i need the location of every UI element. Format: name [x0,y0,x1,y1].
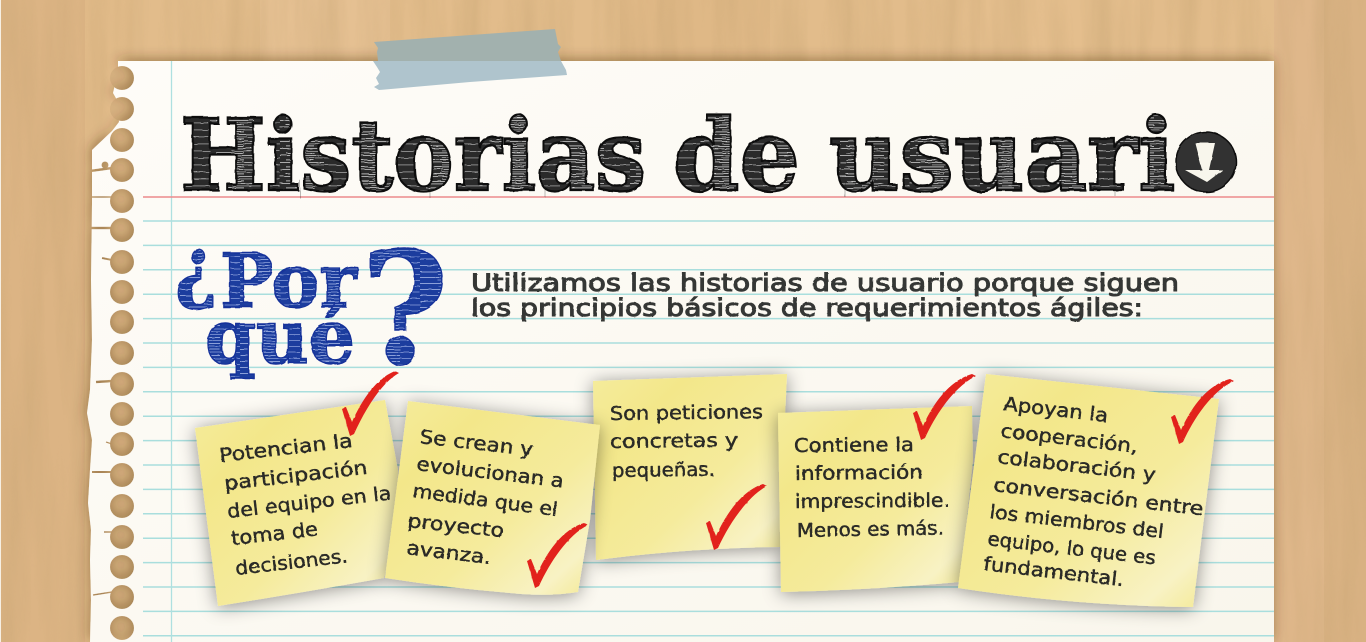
title: de [673,98,800,214]
note 1 text [218,430,393,580]
note 2 text: medida que el [411,480,559,521]
note 1 text: decisiones. [234,545,349,580]
note 5 text: fundamental. [982,553,1125,591]
note 5 text: los miembros del [988,501,1165,543]
note 5 text: colaboración y [996,446,1157,486]
masking tape [373,29,567,90]
note 4 text [794,434,950,542]
heading: ¿Por qué?: ¿ [175,219,217,313]
heading: ¿Por qué?: ? [361,217,449,400]
sticky note 2 [385,401,600,595]
intro text: Utilizamos las historias de usuario porque siguen [471,269,1179,297]
note 2 text: avanza. [405,537,492,569]
check mark 5 [1171,379,1234,444]
sticky note 1 [195,371,399,606]
note 5 text: equipo, lo que es [986,528,1157,569]
note 1 text: toma de [230,518,319,550]
sticky note 4 [778,374,976,592]
title: usuari [829,98,1175,214]
check mark 3 [706,484,767,550]
note 2 text [405,426,565,569]
note 2 text: Se crean y [418,426,534,461]
note 5 text: cooperación, [999,420,1139,458]
heading: ¿Por qué?: qué [205,293,355,381]
note 2 text: evolucionan a [415,453,565,492]
sticky note 3 [593,374,787,560]
notebook paper sheet [87,61,1274,642]
note 5 text: conversación entre [992,474,1205,520]
note 1 text: del equipo en la [226,482,393,523]
check mark 2 [527,523,588,588]
note 3 text [610,401,763,482]
icon: circle with download arrow [1176,132,1236,192]
note 5 text: Apoyan la [1002,393,1109,427]
sticky note 5 [958,374,1234,607]
heading: ¿Por qué?: Por [220,237,358,325]
note 4 text: Contiene la [794,434,914,457]
note 1 text: participación [223,457,369,495]
heading: ¿Por qué? [175,217,449,400]
note 3 text: Son peticiones [610,401,763,425]
intro text: los principios básicos de requerimientos ágiles: [471,294,1143,322]
note 1 text: Potencian la [218,430,354,467]
note 4 text: información [795,461,923,485]
check mark 1 [342,371,399,436]
note 4 text: imprescindible. [795,490,950,513]
punched holes tint [110,66,134,640]
title: Historias [180,98,646,214]
intro text [471,269,1179,322]
note 4 text: Menos es más. [797,517,944,542]
note 5 text [982,393,1205,591]
title [180,98,1175,214]
note 3 text: pequeñas. [612,459,715,482]
note 2 text: proyecto [406,510,505,542]
note 3 text: concretas y [610,429,738,453]
check mark 4 [913,374,976,440]
